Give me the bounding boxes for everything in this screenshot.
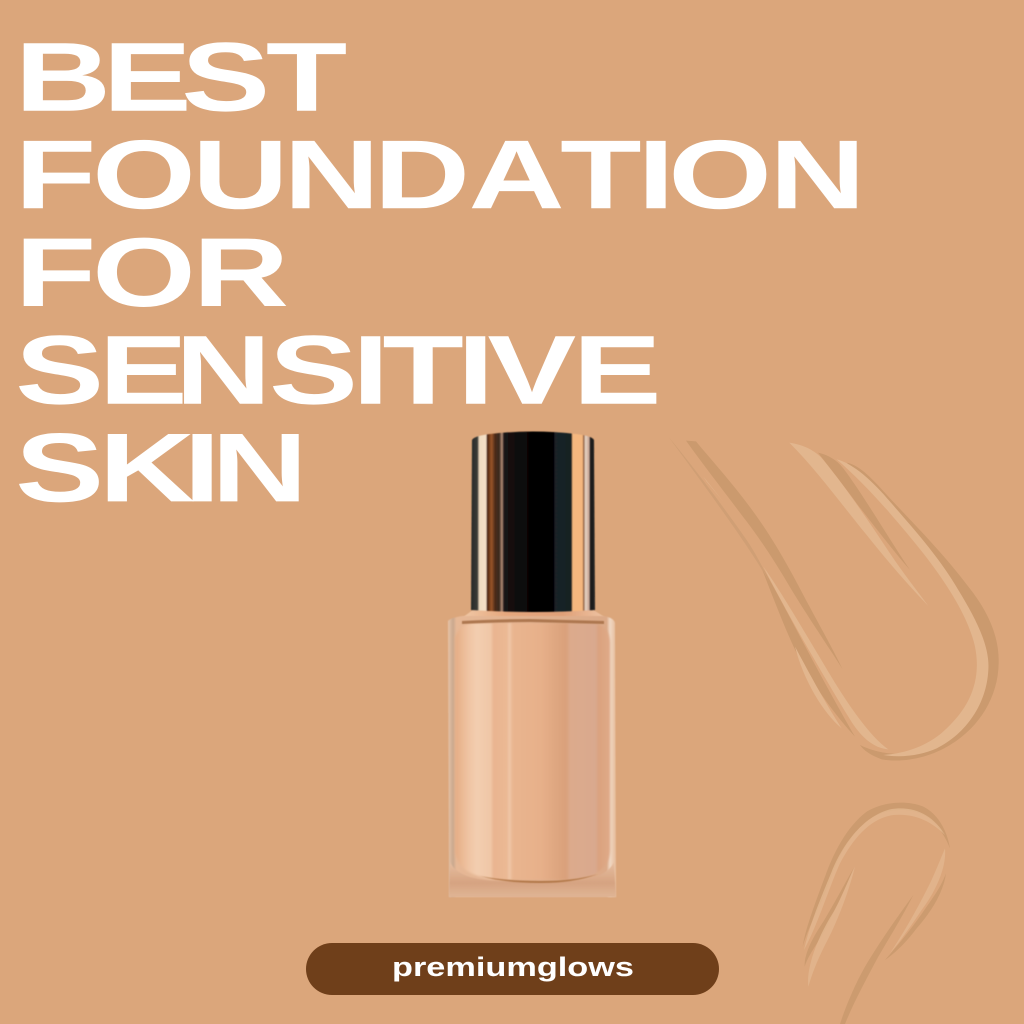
- cap: [471, 432, 595, 612]
- swatch highlight strokes: [703, 443, 988, 756]
- liquid: [455, 623, 610, 880]
- brand pill: [306, 943, 719, 995]
- title: SKIN: [15, 413, 308, 522]
- glass body: [448, 616, 616, 897]
- small swatch shadow strokes: [803, 803, 950, 1024]
- title: FOR: [15, 217, 289, 327]
- swatch faint line: [668, 437, 770, 583]
- foundation bottle: [448, 432, 616, 897]
- title: [15, 22, 866, 522]
- glass base: [449, 862, 616, 897]
- brand name: premiumglows: [392, 952, 634, 982]
- title: FOUNDATION: [15, 119, 866, 229]
- title: SENSITIVE: [15, 315, 662, 425]
- liquid shoulder line: [462, 619, 604, 624]
- small swatch highlight strokes: [804, 808, 945, 987]
- liquid bottom edge: [480, 874, 598, 883]
- large foundation swatch: [668, 437, 999, 761]
- title: BEST: [15, 22, 347, 132]
- swatch shadow strokes: [686, 441, 999, 761]
- small foundation swatch: [803, 803, 950, 1024]
- bottle collar: [462, 609, 606, 624]
